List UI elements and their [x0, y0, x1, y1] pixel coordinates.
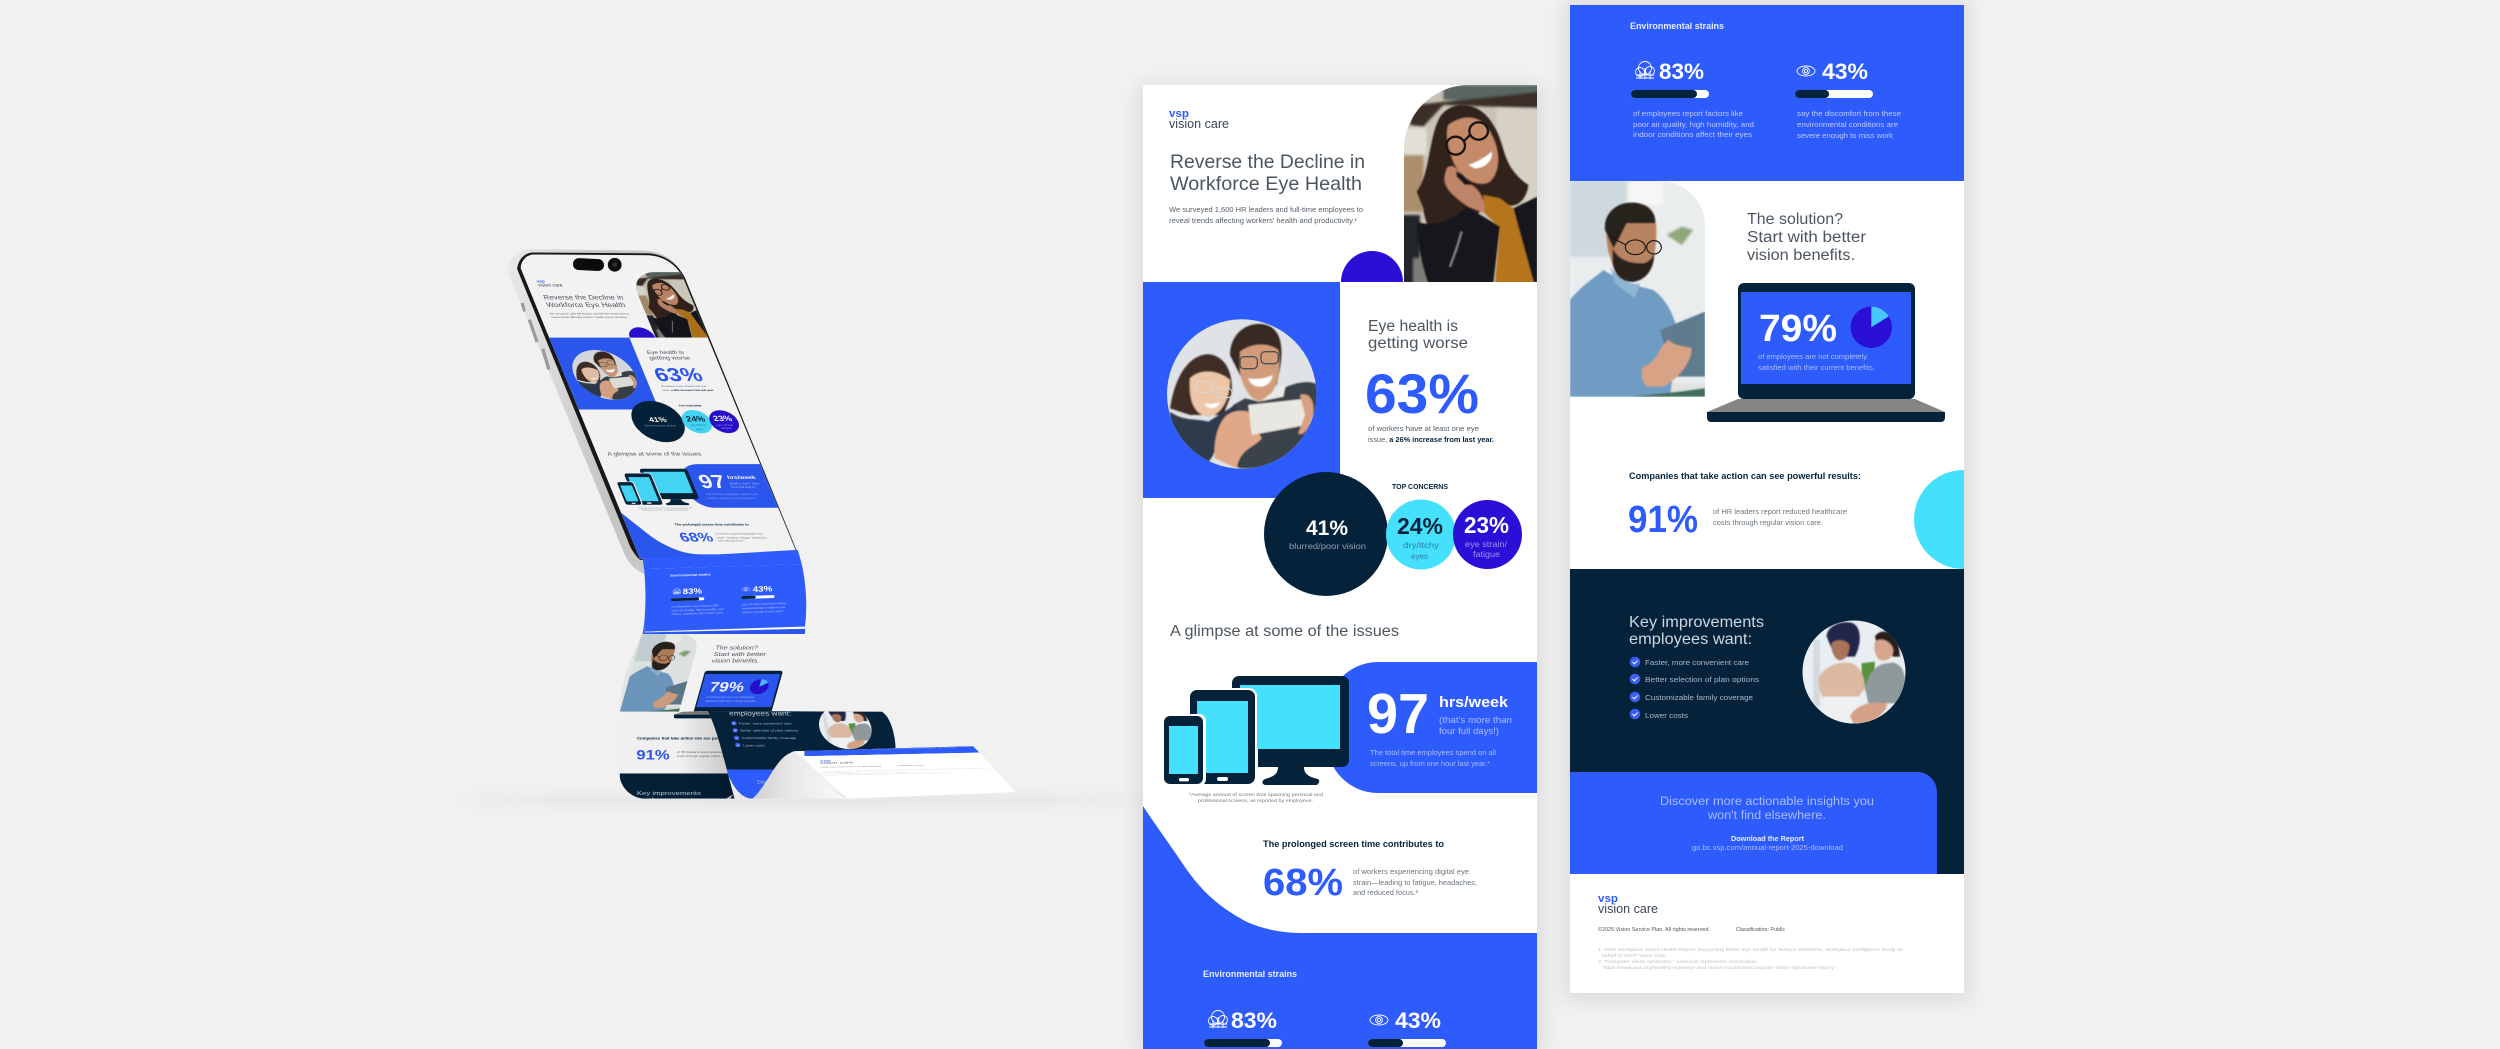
checklist: [1630, 657, 1759, 720]
panel: infographic page one: [1143, 85, 1540, 1049]
icon: smartphone: [1162, 714, 1206, 786]
heading: prolonged screen time: The prolonged screen time contributes to: [1263, 839, 1444, 849]
text: 43% description: [1797, 109, 1901, 140]
bubble: 24% dry/itchy eyes: dry/itchy: [1403, 540, 1440, 550]
stat: 97 hrs/week: The total time employees spend on all: [1370, 748, 1496, 757]
stat: 68%: [1263, 862, 1477, 904]
section: key improvements: [1570, 569, 1964, 874]
text: 43% description: severe enough to miss work: [1797, 131, 1893, 140]
stat: 91%: of HR leaders report reduced healthcare: [1713, 507, 1847, 516]
stat: 97 hrs/week: (that's more than: [1439, 714, 1512, 725]
blue block: [1143, 282, 1340, 498]
icon: devices: [1162, 676, 1349, 789]
phone screen showing infographic page one: [520, 254, 796, 559]
infographic canvas: [508, 0, 1972, 1049]
stat description: of workers have at least one eye: [1368, 424, 1479, 433]
laptop lid: [1738, 283, 1915, 399]
icon: air tree: [1636, 62, 1654, 79]
text: 43% description: say the discomfort from these: [1797, 109, 1901, 118]
bubble: 41% blurred/poor vision: blurred/poor vision: [1289, 541, 1366, 551]
bubble: 24% dry/itchy eyes: 24%: [1397, 513, 1443, 539]
logo: vsp vision care: [1169, 108, 1229, 131]
text: download the report: go.bc.vsp.com/annual-report-2025-download: [1692, 843, 1843, 852]
text: discover more: won't find elsewhere.: [1707, 810, 1826, 822]
title: Workforce Eye Health: [1170, 173, 1362, 195]
text: 83% description: indoor conditions affect their eyes: [1633, 130, 1752, 139]
ribbon: wave fold: [752, 753, 847, 799]
section: environmental strains top: 43%: [1395, 1008, 1441, 1033]
bubble: 41% blurred/poor vision: [1264, 472, 1388, 596]
panel shadows: [1138, 0, 1969, 1049]
stat: 68%: and reduced focus.²: [1353, 888, 1419, 897]
text: 79% description: [1758, 352, 1875, 372]
icon: monitor: [1232, 676, 1349, 789]
logo: vsp vision care footer: vision care: [1598, 901, 1658, 916]
section: environmental strains: [1570, 5, 1964, 181]
section: environmental strains top: 83%: [1231, 1008, 1277, 1033]
ribbon: floor sheet with footer: [794, 746, 1016, 798]
stat: 68%: 68%: [1263, 862, 1343, 904]
bar: 43%: [1368, 1039, 1446, 1047]
decorative cyan circle: [1914, 470, 2013, 569]
text: copyright and classification: ©2025 Vision Service Plan. All rights reserved.: [1598, 926, 1710, 933]
heading: key improvements: employees want:: [1629, 631, 1752, 648]
laptop graphic: [1707, 283, 1945, 422]
ribbon: laptop base edge: [674, 711, 709, 720]
intro text: reveal trends affecting workers’ health and productivity.¹: [1169, 216, 1358, 225]
bar: 43%: [1795, 90, 1873, 98]
text: discover more: [1660, 796, 1874, 822]
photo: father and daughter selfie: [1160, 315, 1320, 475]
ribbon: environmental strains: [642, 550, 806, 634]
section: environmental strains top: Environmental strains: [1203, 969, 1297, 979]
phone mockup with flowing infographic ribbon: [508, 249, 1016, 799]
heading: eye health is getting worse: getting worse: [1368, 335, 1468, 352]
phone dynamic island and camera: [573, 258, 622, 272]
photo: woman with glasses on phone: [1400, 85, 1540, 285]
heading: a glimpse at some of the issues: A glimpse at some of the issues: [1170, 623, 1399, 640]
text: 79% description: of employees are not completely: [1758, 352, 1867, 361]
footnotes: 2. "Computer vision syndrome," American Optometric Association,: [1598, 959, 1758, 965]
check item: Better selection of plan options: [1645, 675, 1759, 684]
bar: 83%: [1631, 90, 1709, 98]
text: 83% description: [1633, 109, 1754, 139]
intro text: We surveyed 1,600 HR leaders and full-time employees to: [1169, 205, 1363, 214]
bubble: 24% dry/itchy eyes: [1386, 500, 1456, 570]
logo: vsp vision care: vision care: [1169, 116, 1229, 131]
label: top concerns: TOP CONCERNS: [1392, 484, 1448, 491]
stat: 97 hrs/week: 97: [1367, 682, 1429, 746]
footnote: screen time: *Average amount of screen time spanning personal and: [1189, 792, 1323, 798]
text: download the report: Download the Report: [1731, 834, 1805, 843]
laptop screen: [1741, 292, 1911, 384]
panel: infographic page two: [1570, 5, 2013, 993]
icon: tablet: [1188, 688, 1257, 786]
section: environmental strains: 43%: [1822, 59, 1868, 84]
stat: 97 hrs/week: hrs/week: [1439, 694, 1509, 711]
intro text: [1169, 205, 1363, 225]
laptop base: [1707, 399, 1945, 412]
text: discover more: Discover more actionable insights you: [1660, 796, 1874, 808]
check item: Lower costs: [1645, 711, 1688, 720]
section: environmental strains: Environmental strains: [1630, 21, 1724, 31]
bubble: 23% eye strain/fatigue: eye strain/: [1465, 539, 1508, 549]
title: [1170, 151, 1365, 195]
heading: eye health is getting worse: Eye health is: [1368, 318, 1458, 335]
logo: vsp vision care: vsp: [1169, 108, 1189, 120]
stat: 97 hrs/week: four full days!): [1439, 725, 1499, 736]
bubble: 41% blurred/poor vision: 41%: [1306, 517, 1348, 540]
stat: 63%: 63%: [1365, 362, 1479, 425]
bar: 83%: [1204, 1039, 1282, 1047]
floor shadow under phone ribbon: [460, 797, 1140, 803]
text: 79% description: satisfied with their current benefits.: [1758, 363, 1875, 372]
text: copyright and classification: Classification: Public: [1736, 927, 1785, 933]
icon: air tree: [1208, 1010, 1228, 1028]
footnotes: 1. 2025 Workplace Vision Health Report: Supporting Better Eye Health for Today's Workforce, Workplace Intelligence Study on: [1598, 947, 1903, 953]
stat: 68%: strain—leading to fatigue, headaches,: [1353, 878, 1477, 887]
heading: the solution: [1747, 211, 1866, 264]
stat: 97 hrs/week: [1367, 682, 1512, 768]
heading: the solution: Start with better: [1747, 229, 1866, 246]
footnotes: [1598, 947, 1903, 971]
icon: eye: [1370, 1015, 1388, 1025]
footnote: screen time: professional screens, as reported by employees.: [1198, 798, 1313, 804]
ribbon: the solution with laptop: [620, 628, 806, 712]
text: 43% description: environmental conditions are: [1797, 120, 1898, 129]
bubble: 24% dry/itchy eyes: eyes: [1411, 551, 1428, 561]
text: download the report: [1692, 834, 1843, 852]
title: Reverse the Decline in: [1170, 151, 1365, 173]
heading: eye health is getting worse: [1368, 318, 1468, 352]
footnotes: behalf of VSP® Vision Care.: [1602, 952, 1667, 959]
heading: the solution: The solution?: [1747, 211, 1843, 228]
text: 83% description: poor air quality, high humidity, and: [1633, 120, 1754, 129]
heading: the solution: vision benefits.: [1747, 247, 1855, 264]
footnote: screen time: [1189, 792, 1323, 804]
logo: vsp vision care footer: vsp: [1598, 893, 1618, 905]
stat: 79%: 79%: [1759, 308, 1837, 350]
ribbon: key improvements fold: [708, 711, 896, 799]
bubble: 23% eye strain/fatigue: 23%: [1464, 512, 1509, 538]
stat description: issue, a 26% increase from last year.: [1368, 435, 1494, 444]
bubble: 23% eye strain/fatigue: [1453, 500, 1522, 569]
decorative indigo semicircle: [1341, 251, 1403, 282]
ribbon: companies results section: [620, 711, 734, 799]
stat description: [1368, 424, 1494, 444]
bubble: 23% eye strain/fatigue: fatigue: [1473, 549, 1500, 559]
phone body: [508, 249, 800, 574]
text: 83% description: of employees report factors like: [1633, 109, 1743, 118]
heading: key improvements: [1629, 614, 1764, 648]
icon: eye: [1797, 66, 1815, 76]
stat: 91%: 91%: [1628, 499, 1698, 541]
photo: man with tablet: [1570, 180, 1707, 398]
check item: Customizable family coverage: [1645, 693, 1753, 702]
stat: 91%: costs through regular vision care.: [1713, 518, 1823, 527]
logo: vsp vision care footer: [1598, 893, 1658, 916]
photo: two colleagues: [1802, 620, 1907, 725]
blue callout shape: [1327, 662, 1537, 793]
stat: 68%: of workers experiencing digital eye: [1353, 867, 1469, 876]
laptop front edge: [1707, 412, 1945, 422]
section: environmental strains: 83%: [1659, 59, 1704, 84]
stat: 91%: [1628, 499, 1847, 541]
section: environmental strains top: [1203, 969, 1446, 1047]
section: call to action: [1570, 772, 1937, 874]
check item: Faster, more convenient care: [1645, 658, 1749, 667]
heading: companies that take action: Companies that take action can see powerful results:: [1629, 471, 1861, 481]
pie chart: 79 percent: [1851, 307, 1892, 348]
stat: 97 hrs/week: screens, up from one hour last year.*: [1370, 759, 1490, 768]
curved blue band: [1143, 806, 1537, 1049]
heading: key improvements: Key improvements: [1629, 614, 1764, 631]
text: copyright and classification: [1598, 926, 1785, 933]
footnotes: https://www.aoa.org/healthy-eyes/eye-and-vision-conditions/computer-vision-syndrome?sso=y: [1603, 965, 1835, 971]
